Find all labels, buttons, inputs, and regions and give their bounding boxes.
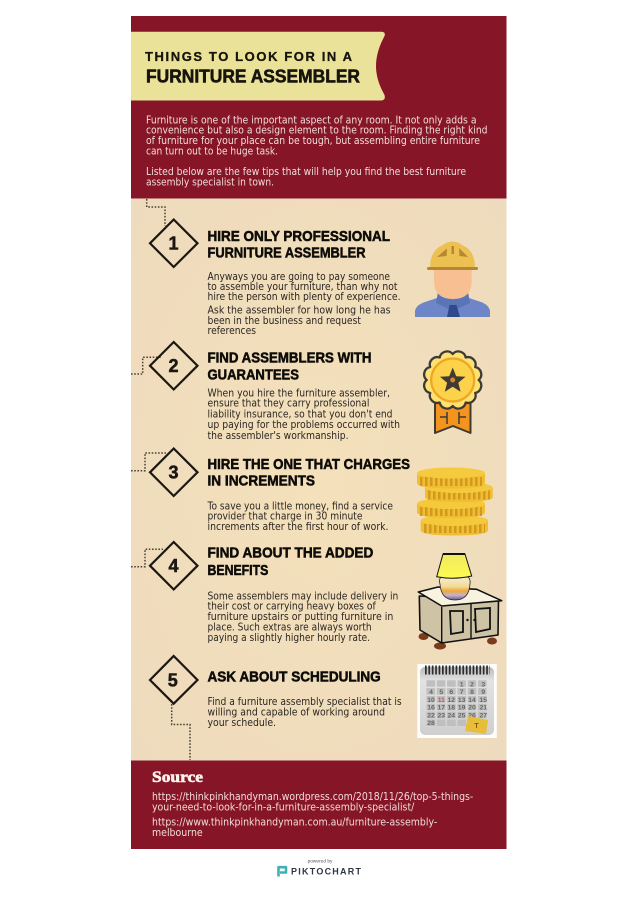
intro text: assembly specialist in town. xyxy=(146,176,274,189)
step 5 text: willing and capable of working around xyxy=(208,706,385,719)
icon: calendar: 11 xyxy=(438,697,445,704)
step 5 text: your schedule. xyxy=(208,716,276,729)
step 4 text: their cost or carrying heavy boxes of xyxy=(208,599,376,612)
step 5 heading: ASK ABOUT SCHEDULING xyxy=(208,669,381,686)
icon: calendar: 8 xyxy=(470,689,474,696)
icon: coin stack xyxy=(417,468,493,536)
intro text: can turn out to be huge task. xyxy=(146,144,278,157)
source heading: Source xyxy=(152,769,203,786)
badge 1 xyxy=(150,220,198,267)
icon: calendar: 18 xyxy=(448,705,455,712)
step 2 heading xyxy=(208,350,372,383)
step 4 text: Some assemblers may include delivery in xyxy=(208,589,398,602)
icon: calendar: 28 xyxy=(427,720,435,727)
step 1 heading: FURNITURE ASSEMBLER xyxy=(208,245,366,262)
icon: calendar: 22 xyxy=(427,712,435,720)
source links: melbourne xyxy=(152,826,203,839)
badge 3: 3 xyxy=(168,462,179,482)
connector 1 xyxy=(147,199,165,226)
step 4 text: furniture upstairs or putting furniture in xyxy=(208,610,393,623)
step 3 text: provider that charge in 30 minute xyxy=(208,509,363,522)
icon: calendar: 20 xyxy=(468,705,476,712)
badge 2 xyxy=(150,342,198,390)
intro text: Furniture is one of the important aspect of any room. It not only adds a xyxy=(146,113,476,126)
step 3 heading: HIRE THE ONE THAT CHARGES xyxy=(208,456,410,473)
footer: Piktochart logo: powered by xyxy=(308,858,333,864)
step 1 text: hire the person with plenty of experience. xyxy=(208,290,400,303)
step 2 text: up paying for the problems occurred with xyxy=(208,418,400,431)
badge 1: 1 xyxy=(168,234,179,254)
step 4 heading: FIND ABOUT THE ADDED xyxy=(208,545,373,562)
panel: header xyxy=(131,16,506,198)
step 2 text: the assembler's workmanship. xyxy=(208,429,348,442)
icon: calendar: 3 xyxy=(481,681,485,688)
source links: https://thinkpinkhandyman.wordpress.com/2018/11/26/top-5-things- xyxy=(152,790,473,803)
badge 4: 4 xyxy=(168,556,179,576)
icon: medal xyxy=(424,351,481,433)
step 4 text: paying a slightly higher hourly rate. xyxy=(208,631,370,644)
icon: calendar: 10 xyxy=(427,697,435,704)
title line 2: FURNITURE ASSEMBLER xyxy=(146,66,360,86)
icon: worker with helmet xyxy=(415,242,490,317)
icon: calendar: 7 xyxy=(460,689,464,696)
badge 5 xyxy=(150,656,198,704)
step 1 text: references xyxy=(208,324,256,337)
step 1 heading: HIRE ONLY PROFESSIONAL xyxy=(208,228,390,245)
icon: calendar: 1 xyxy=(460,681,464,688)
step 3 text xyxy=(207,499,393,533)
icon: calendar: 13 xyxy=(458,697,466,704)
step 1 text: been in the business and request xyxy=(208,314,361,327)
step 2 text xyxy=(208,387,400,442)
source links: your-need-to-look-for-in-a-furniture-assembly-specialist/ xyxy=(152,800,415,813)
icon: calendar: 24 xyxy=(448,712,455,720)
step 1 text xyxy=(208,270,400,337)
step 3 heading xyxy=(208,456,410,490)
icon: calendar: 2 xyxy=(470,681,474,688)
footer: Piktochart logo: PIKTOCHART xyxy=(291,866,362,876)
icon: calendar: 4 xyxy=(429,689,433,696)
step 3 text: increments after the first hour of work. xyxy=(208,520,388,533)
badge 4 xyxy=(150,542,198,590)
icon: calendar: 25 xyxy=(458,712,466,720)
icon: calendar: 26 xyxy=(468,712,476,720)
step 2 text: ensure that they carry professional xyxy=(208,397,370,410)
icon: calendar: 17 xyxy=(438,705,445,712)
connector 4 xyxy=(131,549,163,567)
badge 2: 2 xyxy=(168,356,179,376)
icon: calendar: 23 xyxy=(438,712,445,720)
step 5 text xyxy=(208,695,402,729)
icon: calendar: 5 xyxy=(439,689,443,696)
icon: calendar: 14 xyxy=(468,697,476,704)
intro text: Listed below are the few tips that will help you find the best furniture xyxy=(146,165,466,178)
step 2 text: liability insurance, so that you don't end xyxy=(208,407,392,420)
icon: calendar: 6 xyxy=(449,689,453,696)
icon: calendar xyxy=(417,664,497,738)
icon: calendar: 9 xyxy=(481,689,485,696)
step 4 heading: BENEFITS xyxy=(208,562,268,579)
source links: https://www.thinkpinkhandyman.com.au/furniture-assembly- xyxy=(152,816,437,829)
icon: calendar: 19 xyxy=(458,705,466,712)
connector 5 xyxy=(172,704,190,760)
step 1 text: Ask the assembler for how long he has xyxy=(208,303,391,316)
step 4 text: place. Such extras are always worth xyxy=(208,621,372,634)
title banner xyxy=(131,32,385,101)
intro text xyxy=(146,113,488,189)
icon: calendar: T xyxy=(474,723,479,730)
step 1 text: Anyways you are going to pay someone xyxy=(208,270,390,283)
step 3 text: To save you a little money, find a service xyxy=(207,499,393,512)
panel: tips background xyxy=(131,198,506,761)
intro text: convenience but also a design element to the room. Finding the right kind xyxy=(146,124,488,136)
step 2 heading: GUARANTEES xyxy=(208,366,299,383)
intro text: of furniture for your place can be tough, but assembling entire furniture xyxy=(146,134,480,147)
icon: calendar: 12 xyxy=(448,697,455,704)
icon: calendar: 27 xyxy=(480,712,487,720)
connector 3 xyxy=(131,453,166,471)
footer: Piktochart logo xyxy=(278,858,362,876)
badge 5: 5 xyxy=(168,670,178,690)
step 2 text: When you hire the furniture assembler, xyxy=(208,387,390,400)
badge 3 xyxy=(150,448,198,496)
connector 2 xyxy=(131,357,161,374)
step 5 text: Find a furniture assembly specialist that is xyxy=(208,695,402,708)
source links xyxy=(152,790,473,839)
step 1 heading xyxy=(208,228,390,262)
title line 1: THINGS TO LOOK FOR IN A xyxy=(145,49,353,64)
icon: calendar: 15 xyxy=(480,697,487,704)
step 2 heading: FIND ASSEMBLERS WITH xyxy=(208,350,372,367)
icon: lamp on cabinet xyxy=(418,554,502,650)
step 4 text xyxy=(208,589,398,644)
panel: source xyxy=(131,760,506,849)
icon: calendar: 16 xyxy=(427,705,435,712)
step 1 text: to assemble your furniture, than why not xyxy=(208,280,398,293)
step 4 heading xyxy=(208,545,373,579)
step 3 heading: IN INCREMENTS xyxy=(208,473,315,490)
icon: calendar: 21 xyxy=(480,705,487,712)
